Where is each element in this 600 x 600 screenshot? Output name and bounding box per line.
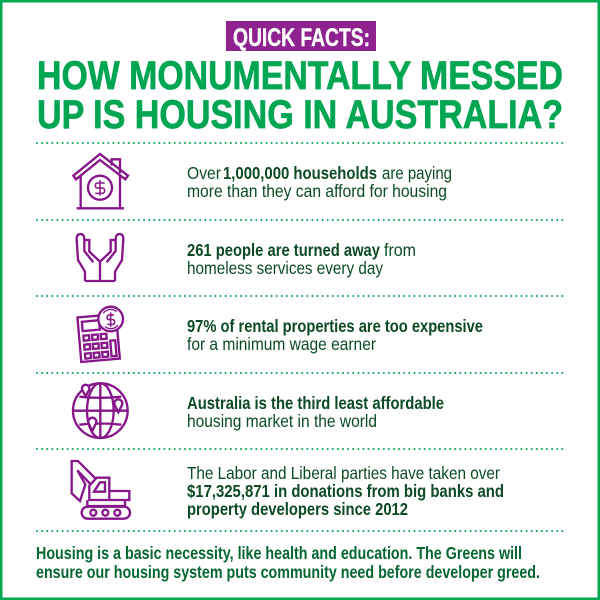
text: rental properties — [187, 316, 483, 354]
badge: quick facts: QUICK FACTS: — [233, 24, 370, 52]
text: homeless services: 261 people are turned away — [187, 240, 380, 260]
text: donations: The Labor and Liberal parties have taken over — [187, 463, 500, 483]
text: least affordable: housing market in the world — [187, 411, 377, 431]
text: homeless services: from — [384, 240, 416, 260]
icon: excavator — [72, 461, 130, 519]
text: households — [187, 163, 452, 201]
text: donations — [187, 463, 504, 519]
text: households: are paying — [382, 163, 452, 183]
text: rental properties: 97% of rental properties are too expensive — [187, 316, 483, 336]
text: homeless services — [187, 240, 416, 278]
icon: calculator with coin — [77, 307, 123, 362]
icon: globe with pins — [73, 383, 128, 438]
text: households: more than they can afford for housing — [187, 181, 447, 201]
text: donations: $17,325,871 in donations from big banks and — [187, 481, 504, 501]
text: households: Over — [187, 163, 221, 183]
title — [37, 54, 563, 137]
text: rental properties: for a minimum wage earner — [187, 334, 376, 354]
icon: house with dollar — [73, 154, 128, 208]
text: homeless services: homeless services every day — [187, 258, 383, 278]
icon: open hands — [77, 234, 123, 281]
text: least affordable: Australia is the third least affordable — [187, 393, 444, 413]
text: households: 1,000,000 households — [223, 163, 377, 183]
closing statement — [36, 543, 540, 582]
text: least affordable — [187, 393, 444, 431]
text: donations: property developers since 2012 — [187, 499, 408, 519]
